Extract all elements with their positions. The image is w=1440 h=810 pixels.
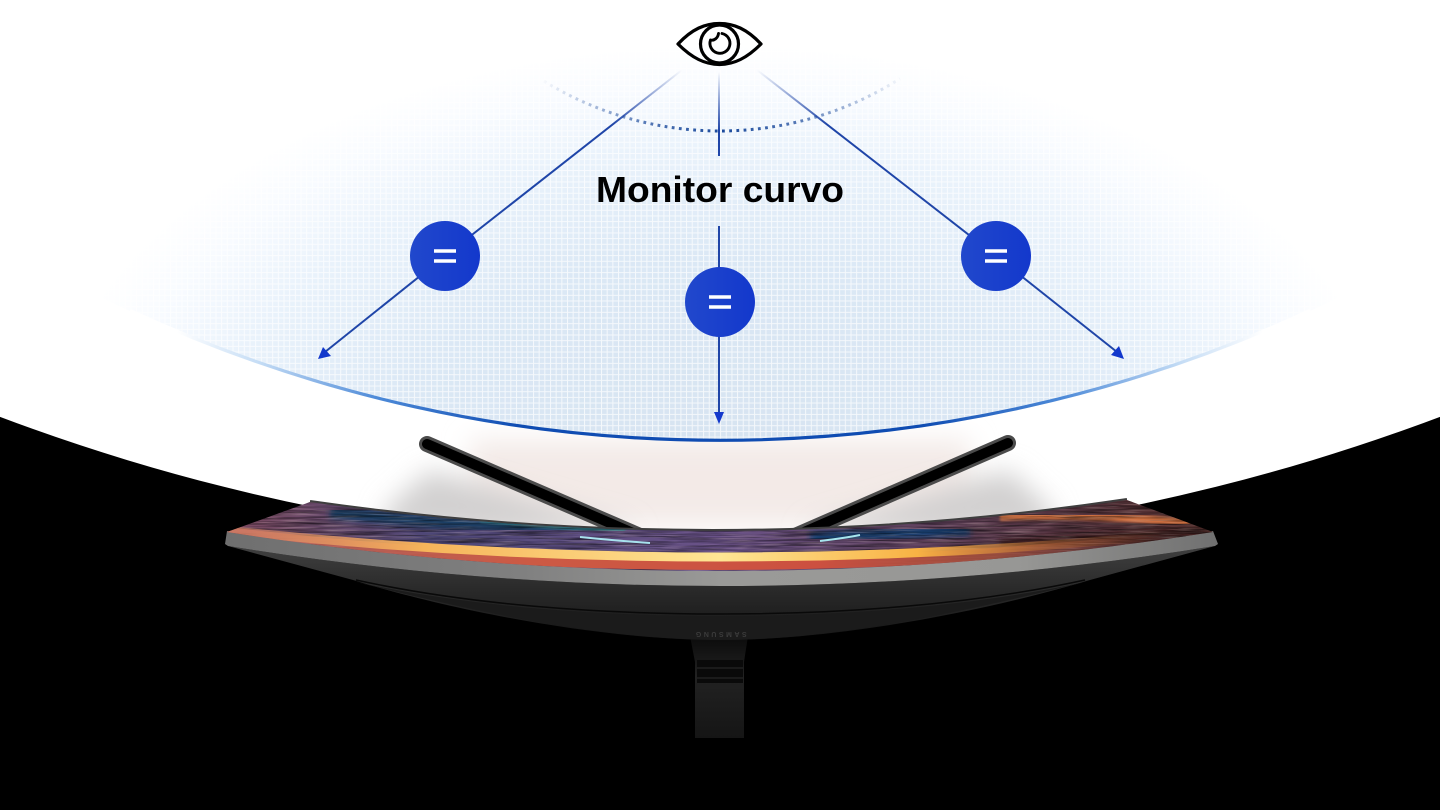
icon: eye bbox=[678, 24, 761, 64]
icon: equals badge right bbox=[961, 221, 1031, 291]
arrow: left sight line bbox=[318, 70, 682, 359]
icon: equals badge centre bbox=[685, 267, 755, 337]
monitor stand arm right bbox=[795, 443, 1008, 536]
monitor screen image bbox=[227, 500, 1213, 571]
monitor stand arm left bbox=[427, 444, 640, 536]
monitor bezel bbox=[225, 531, 1218, 586]
icon: equals badge left bbox=[410, 221, 480, 291]
panel: blue viewing field with grid bbox=[163, 92, 1276, 439]
white background circle bbox=[0, 0, 1440, 548]
monitor top edge bbox=[310, 500, 1127, 531]
monitor back housing: SAMSUNG bbox=[693, 630, 747, 637]
shadow behind monitor bbox=[385, 440, 1052, 532]
curved screen arc bbox=[130, 310, 1310, 440]
arrow: right sight line bbox=[757, 70, 1124, 359]
monitor back housing bbox=[228, 546, 1215, 640]
title: Monitor curvo bbox=[596, 169, 844, 210]
arrow: centre sight line bbox=[714, 72, 724, 424]
dotted focal arc bbox=[544, 79, 900, 131]
monitor stand neck bbox=[690, 636, 748, 738]
